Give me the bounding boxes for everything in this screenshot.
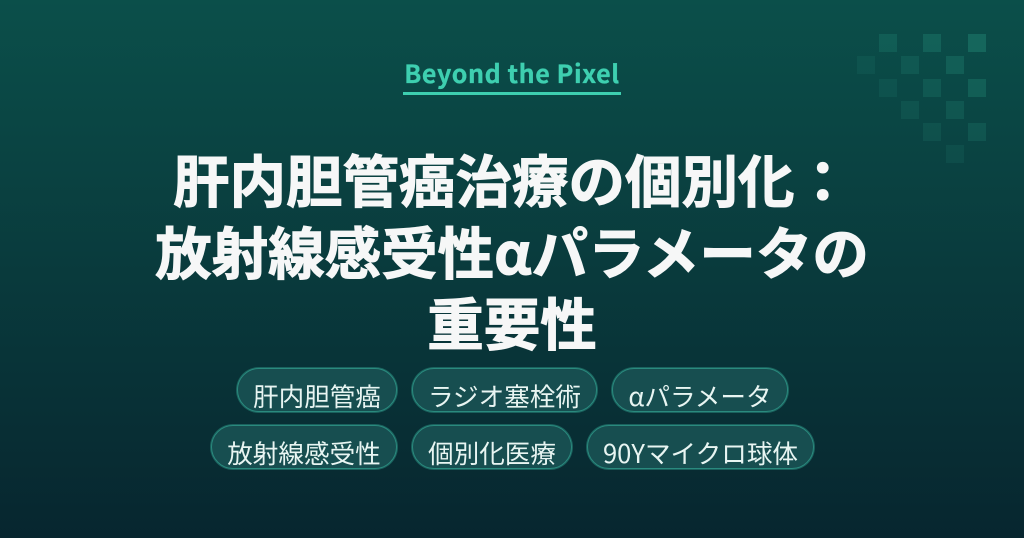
decorative square pattern [857, 34, 986, 163]
tag: αパラメータ: αパラメータ [628, 377, 772, 414]
title: 重要性 [427, 280, 597, 362]
title [155, 137, 869, 362]
tag: ラジオ塞栓術: ラジオ塞栓術 [428, 377, 581, 414]
title: 肝内胆管癌治療の個別化： [173, 137, 851, 219]
tag: 90Yマイクロ球体 [587, 425, 814, 469]
tag: 個別化医療 [412, 425, 572, 469]
tag: 90Yマイクロ球体: 90Yマイクロ球体 [603, 434, 798, 471]
tag: 個別化医療: 個別化医療 [428, 434, 556, 471]
tag: 放射線感受性 [211, 425, 397, 469]
tag: ラジオ塞栓術 [412, 368, 597, 412]
title: 放射線感受性αパラメータの [155, 209, 869, 291]
tag: αパラメータ [612, 368, 788, 412]
brand heading with underline: Beyond the Pixel [404, 55, 620, 91]
tag: 肝内胆管癌 [237, 368, 397, 412]
tag: 肝内胆管癌: 肝内胆管癌 [253, 377, 381, 414]
tag: 放射線感受性: 放射線感受性 [227, 434, 381, 471]
